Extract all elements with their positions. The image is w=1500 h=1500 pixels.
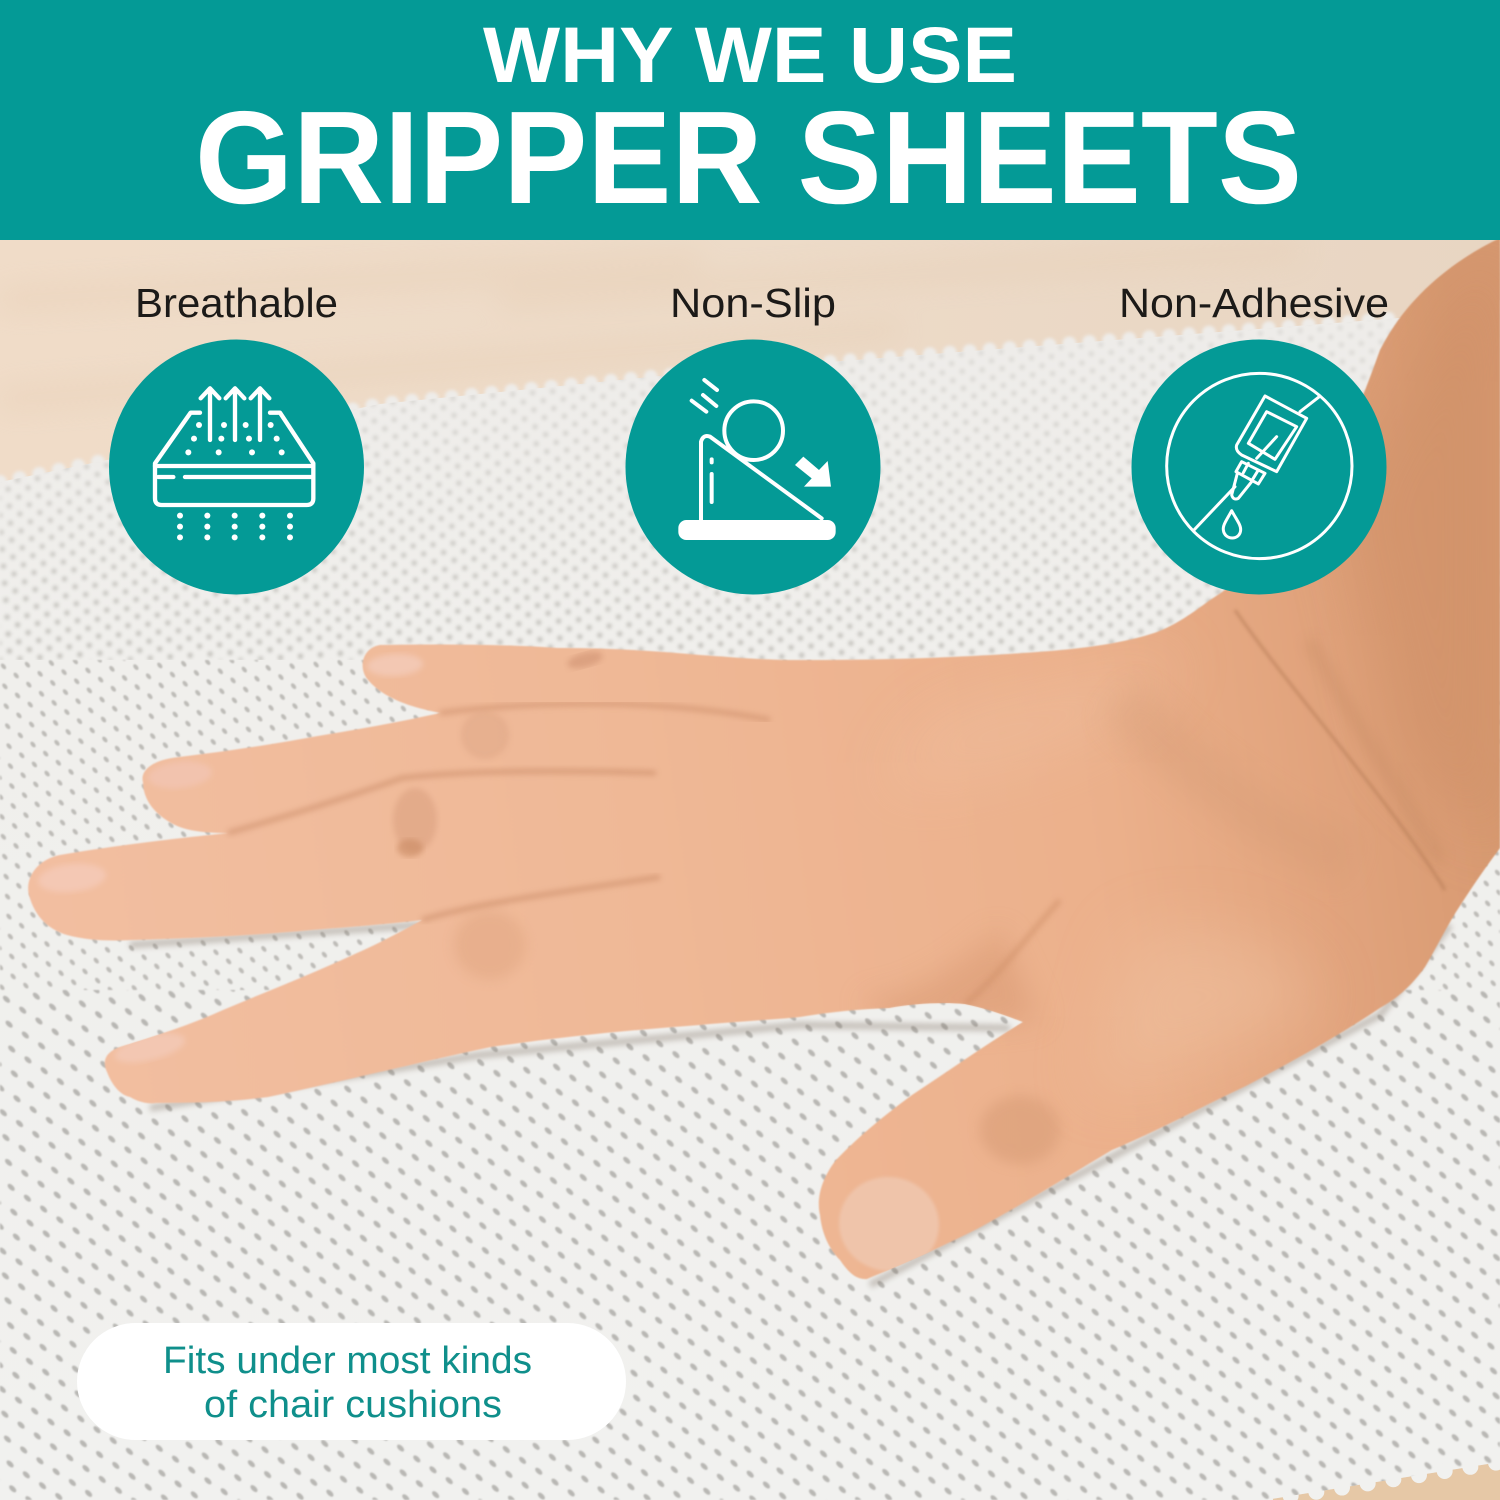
callout line 1: Fits under most kinds — [163, 1340, 532, 1382]
title line 2: GRIPPER SHEETS — [195, 84, 1302, 231]
photo: white gripper mat — [0, 300, 1500, 1500]
label: Non-Slip: Non-Slip — [670, 280, 836, 326]
callout pill — [77, 1323, 626, 1440]
title line 1: WHY WE USE — [483, 10, 1017, 99]
photo: hand resting on the mat — [28, 238, 1500, 1285]
icon: breathable mattress — [109, 340, 364, 594]
label: Breathable: Breathable — [135, 280, 338, 326]
label: Non-Adhesive: Non-Adhesive — [1119, 280, 1389, 326]
finger and palm shading — [228, 238, 1500, 1164]
icon: non-slip incline — [626, 340, 880, 594]
header band — [0, 0, 1500, 240]
fingernails — [37, 653, 945, 1278]
icon: non-adhesive glue bottle — [1132, 340, 1386, 594]
callout line 2: of chair cushions — [204, 1384, 502, 1426]
